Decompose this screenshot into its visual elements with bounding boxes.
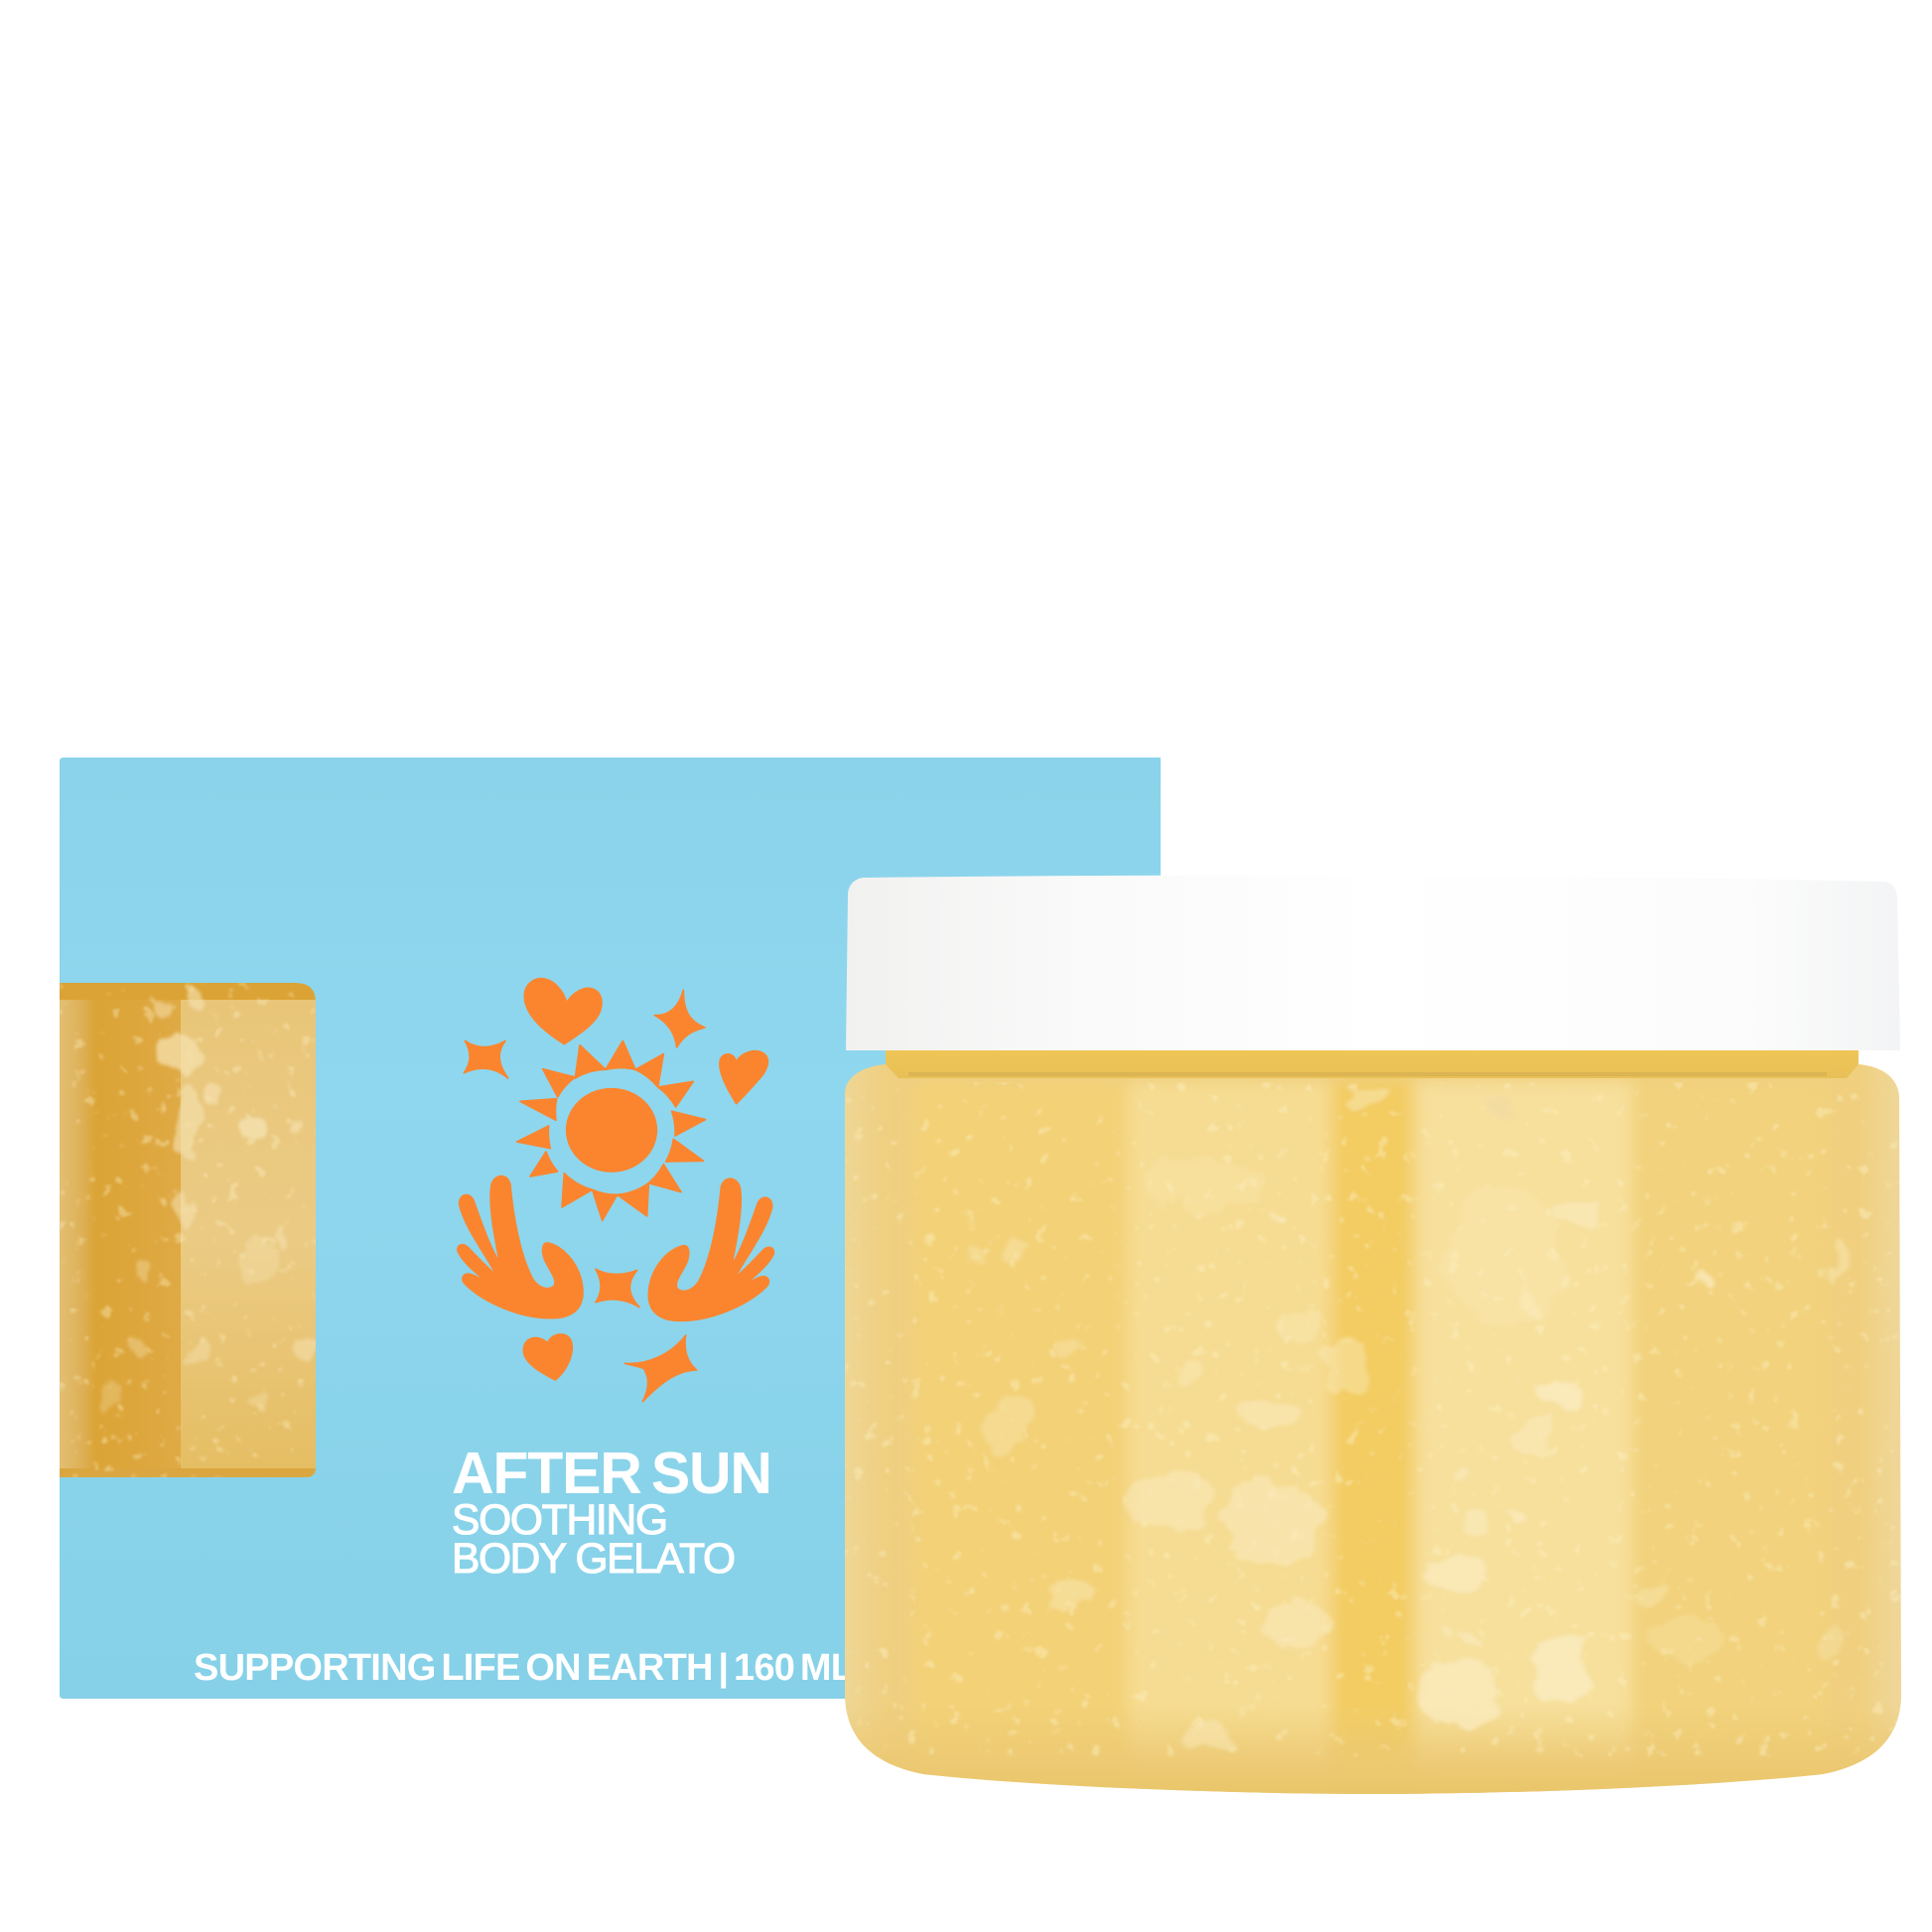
icon: sun disc bbox=[567, 1089, 656, 1172]
heading: After Sun: AFTER SUN bbox=[452, 1441, 772, 1506]
panel: jar bbox=[845, 876, 1901, 1797]
jar flakes bbox=[967, 1085, 1847, 1749]
box face bbox=[60, 758, 1161, 1699]
box window with product bbox=[60, 983, 318, 1477]
text: Soothing: SOOTHING bbox=[452, 1497, 668, 1544]
icon: large heart bbox=[524, 979, 602, 1044]
jar lid bbox=[846, 876, 1900, 1050]
icon: sun rays bbox=[517, 1040, 706, 1220]
icon: star left bbox=[464, 1040, 508, 1078]
icon: bottom star bbox=[624, 1335, 697, 1402]
text: tagline and size: SUPPORTING LIFE ON EARTH | 160 ML bbox=[194, 1647, 854, 1689]
jar neck bbox=[886, 1047, 1859, 1078]
jar body bbox=[845, 1064, 1901, 1797]
icon: centre star bbox=[596, 1269, 639, 1308]
logo: sun, hands, hearts and stars bbox=[458, 979, 773, 1402]
icon: bottom heart bbox=[523, 1334, 572, 1380]
text: Body Gelato: BODY GELATO bbox=[452, 1536, 736, 1583]
icon: left hand bbox=[458, 1176, 583, 1318]
panel: blue product box bbox=[60, 758, 1161, 1699]
icon: heart right bbox=[720, 1051, 767, 1104]
icon: right hand bbox=[648, 1178, 773, 1320]
product scene bbox=[60, 758, 1901, 1794]
icon: star top right bbox=[654, 990, 705, 1047]
